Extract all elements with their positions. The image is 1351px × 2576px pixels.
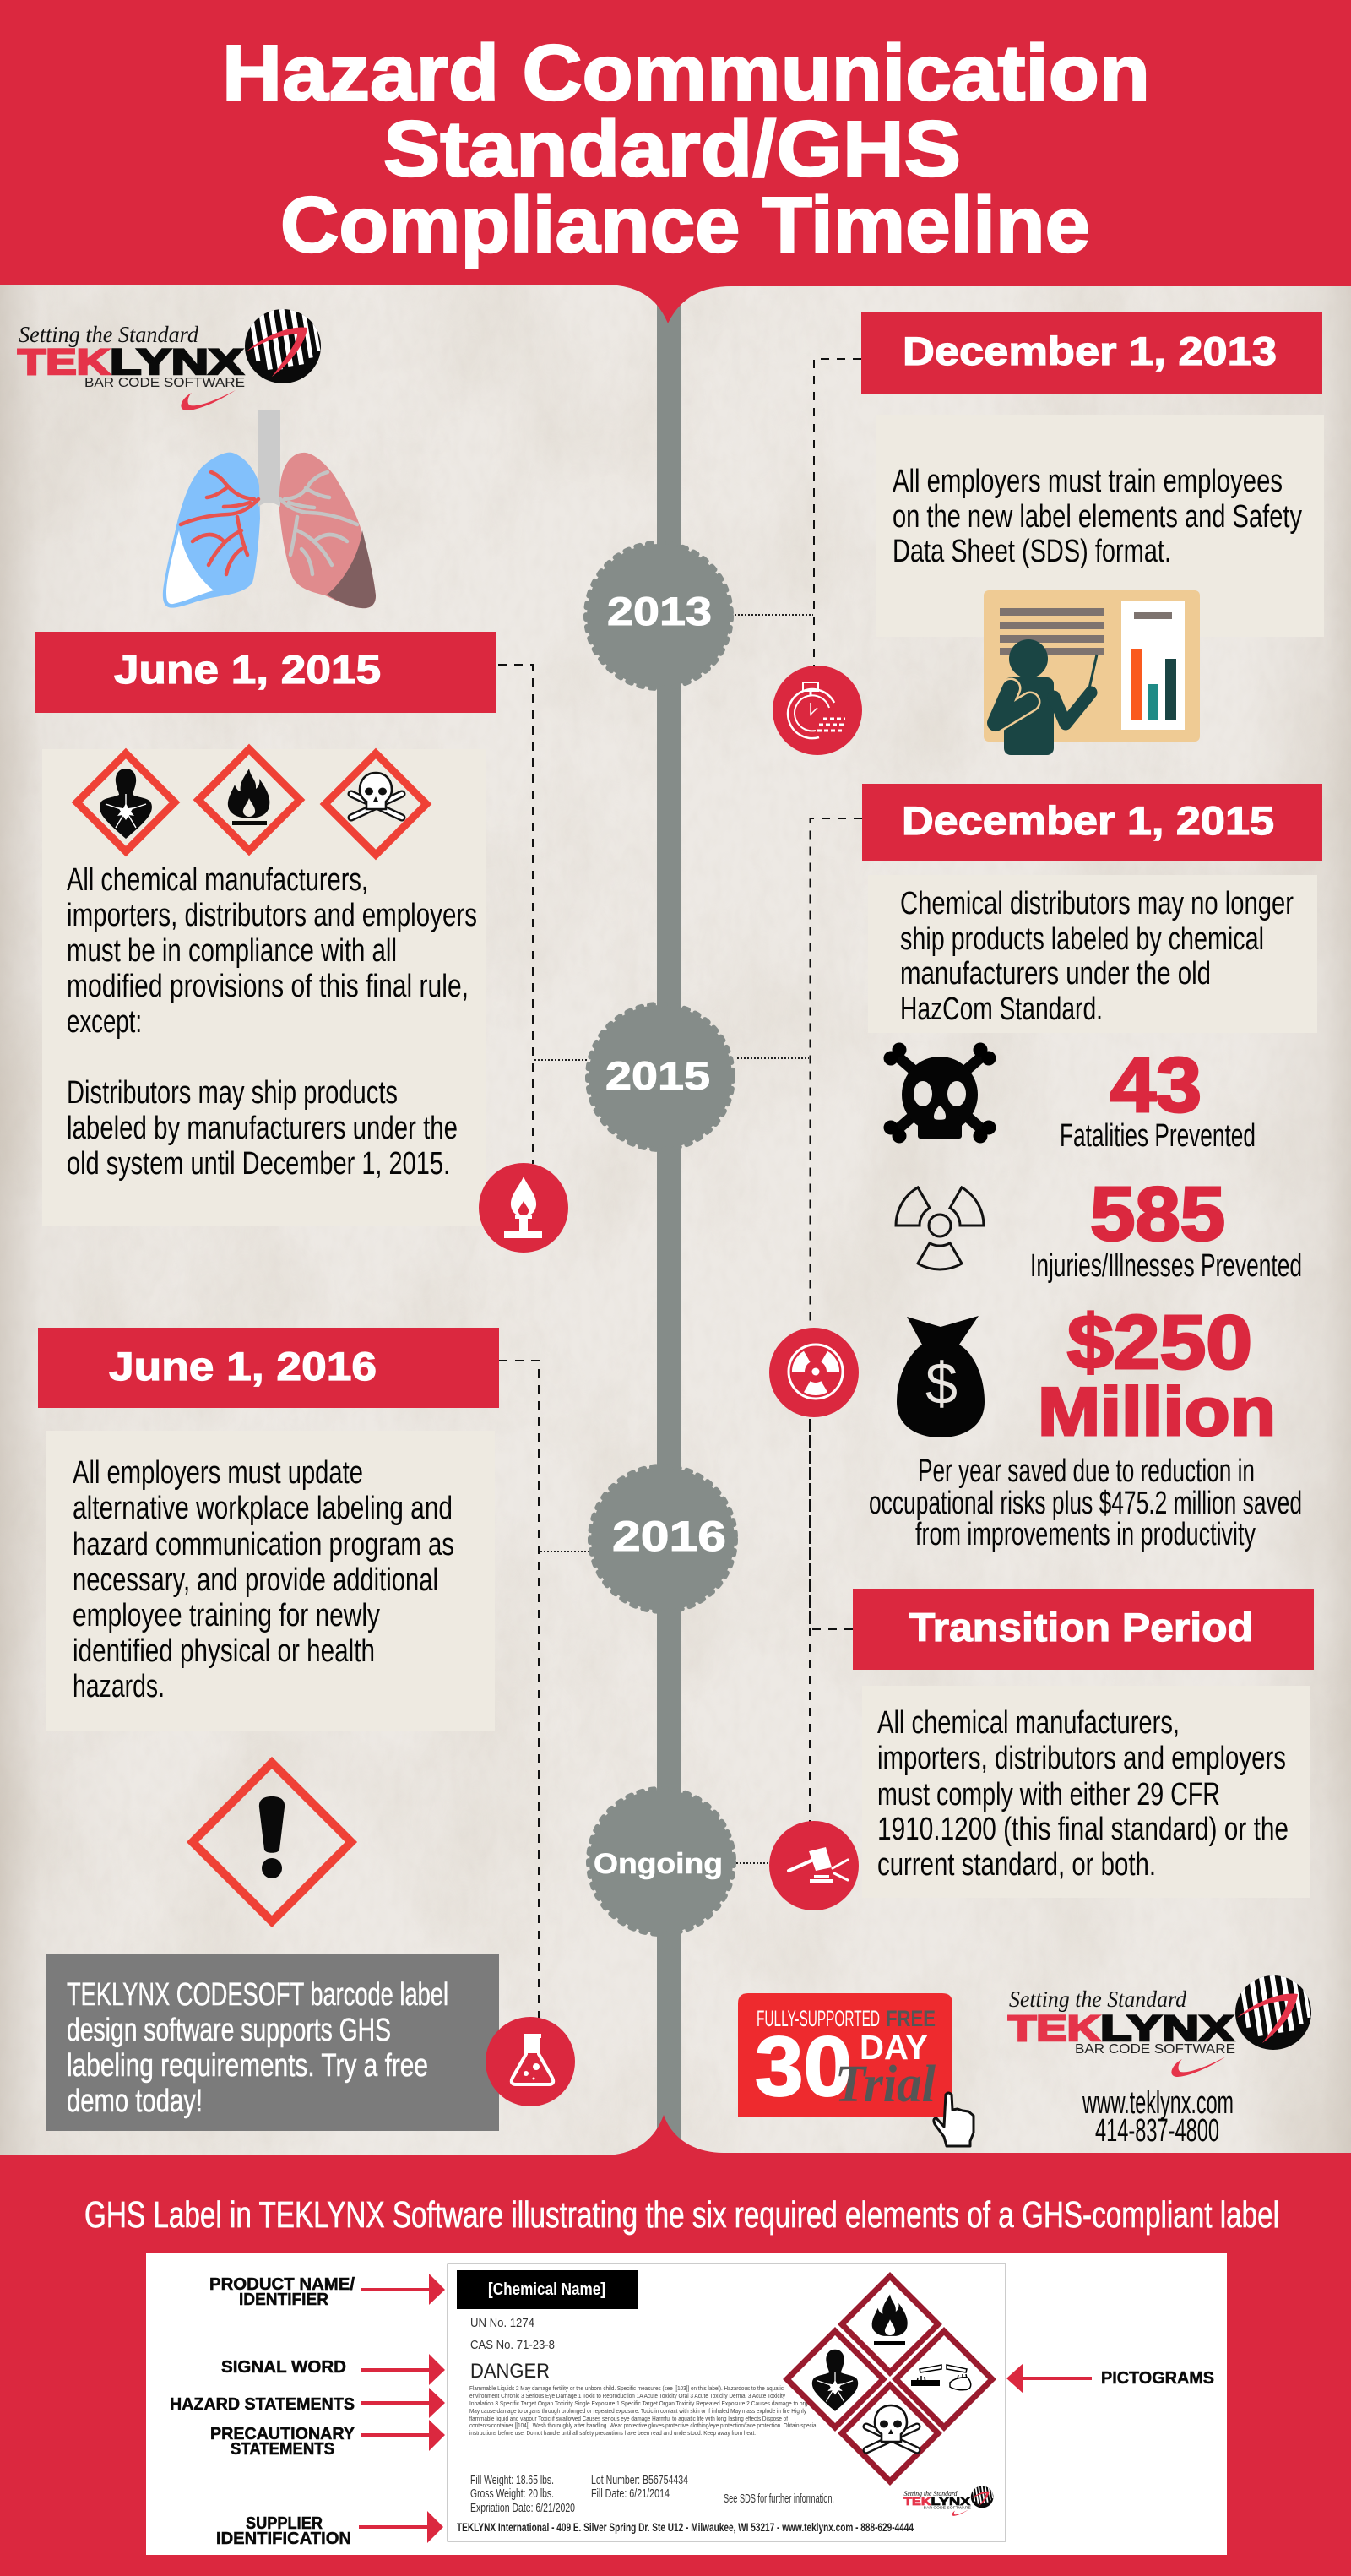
pictogram: health hazard (77, 753, 175, 851)
stat: 585 injuries: 585 (1090, 1172, 1225, 1257)
text: contact details: 414-837-4800 (1095, 2113, 1219, 2149)
icon: radiation (769, 1328, 859, 1417)
stat: $250 Million: Million (1038, 1374, 1276, 1450)
sample GHS label: DANGER (470, 2360, 550, 2383)
button: 30 day trial: DAY (860, 2028, 928, 2067)
callout: CODESOFT demo: labeling requirements. Try a free (67, 2048, 428, 2084)
footer band (0, 2115, 1351, 2576)
panel: June 1, 2016: All employers must update (73, 1455, 363, 1491)
panel: GHS label diagram (146, 2253, 1227, 2555)
date bar: Transition Period (853, 1589, 1314, 1670)
callout: signal word (221, 2354, 445, 2385)
body text: except: (67, 1004, 142, 1040)
panel: Transition Period: All chemical manufacturers, (877, 1705, 1180, 1741)
callout: product name: IDENTIFIER (239, 2291, 329, 2309)
panel: June 1, 2016: identified physical or health (73, 1633, 375, 1669)
date bar: December 1, 2013 (861, 312, 1322, 394)
panel: June 1, 2016: alternative workplace labeling and (73, 1491, 453, 1526)
logo: TEKLYNX footer: LYNX (1100, 2008, 1234, 2049)
date bar: December 1, 2013: December 1, 2013 (903, 329, 1277, 373)
sample GHS label: TEKLYNX International - 409 E. Silver Spring Dr. Ste U12 - Milwaukee, WI 53217 - www.teklynx.com - 888-629-4444 (457, 2520, 914, 2534)
icon: presenter with chart (984, 590, 1200, 755)
stat: $250 Million (1038, 1301, 1276, 1450)
date bar: December 1, 2015: December 1, 2015 (902, 798, 1274, 843)
callout: supplier identification: SUPPLIER (246, 2514, 323, 2533)
sample GHS label: Lot Number: B56754434 (591, 2473, 688, 2487)
connector: June 1, 2016 (499, 1361, 539, 2019)
logo: TEKLYNX footer: Setting the Standard (1009, 1986, 1186, 2012)
callout: product name (209, 2274, 445, 2309)
sample GHS label: Expriation Date: 6/21/2020 (470, 2501, 575, 2515)
stat: 43 fatalities: 43 (1110, 1042, 1202, 1128)
pictogram: flame (842, 2276, 938, 2372)
logo: TEKLYNX on label: TEK (903, 2495, 932, 2508)
body text: modified provisions of this final rule, (67, 969, 469, 1004)
hazard and precautionary statements: instructions before use. Do not handle until all safety precautions have been read and understood. Keep away from heat. (469, 2429, 756, 2437)
logo: TEKLYNX top left (18, 302, 321, 410)
sample GHS label: CAS No. 71-23-8 (470, 2338, 555, 2352)
panel: June 1, 2016: hazard communication program as (73, 1527, 454, 1562)
icon: hand cursor (934, 2093, 974, 2146)
callout: supplier identification: IDENTIFICATION (216, 2530, 351, 2548)
pictogram: exclamation (193, 1763, 351, 1921)
title: Hazard Communication (222, 29, 1150, 117)
panel: June 1, 2016 (46, 1431, 495, 1731)
callout: CODESOFT demo: design software supports GHS (67, 2013, 391, 2048)
callout: signal word: SIGNAL WORD (221, 2358, 346, 2377)
stat: 43 fatalities (1060, 1042, 1256, 1154)
panel: Transition Period: current standard, or both. (877, 1847, 1156, 1883)
pictogram: health hazard (787, 2331, 883, 2427)
body text: importers, distributors and employers (67, 898, 477, 933)
callout: pictograms (1006, 2363, 1214, 2394)
badge: 2013 (586, 543, 731, 688)
sample GHS label: See SDS for further information. (724, 2492, 834, 2506)
logo: TEKLYNX footer (1008, 1969, 1311, 2077)
connector: June 1, 2015 (498, 665, 533, 1164)
panel: Transition Period: must comply with either 29 CFR (877, 1777, 1220, 1812)
logo: TEKLYNX footer: BAR CODE SOFTWARE (1075, 2042, 1235, 2057)
button: 30 day trial (738, 1993, 952, 2117)
body text: Distributors may ship products (67, 1075, 398, 1111)
sample GHS label: Fill Date: 6/21/2014 (591, 2486, 670, 2501)
body text: labeled by manufacturers under the (67, 1111, 458, 1146)
badge: 2016 (590, 1466, 735, 1611)
logo: TEKLYNX top left: Setting the Standard (19, 322, 198, 347)
logo: TEKLYNX footer: TEK (1008, 2008, 1100, 2049)
timeline bar (657, 287, 681, 2145)
icon: money bag: $ (925, 1350, 958, 1416)
stat: 43 fatalities: Fatalities Prevented (1060, 1118, 1256, 1154)
body text: All chemical manufacturers, (67, 862, 368, 898)
date bar: June 1, 2016: June 1, 2016 (109, 1344, 377, 1389)
panel: June 1, 2016: employee training for newly (73, 1598, 380, 1633)
pictogram: flame (198, 749, 300, 851)
title (222, 29, 1150, 269)
icon: gavel (769, 1821, 859, 1910)
icon: flask (486, 2017, 575, 2106)
badge: 2016: 2016 (612, 1513, 726, 1560)
icon: lungs (163, 410, 376, 608)
callout: precautionary statements (210, 2420, 445, 2459)
logo: TEKLYNX top left: BAR CODE SOFTWARE (84, 376, 245, 390)
body text: old system until December 1, 2015. (67, 1146, 450, 1182)
hazard and precautionary statements: contents/container [[104]]. Wash thoroughly after handling. Wear protective gloves/protective clothing/eye protection/face protection. Obtain special (469, 2421, 817, 2429)
hazard and precautionary statements: Inhalation 3 Specific Target Organ Toxicity Single Exposure 1 Specific Target Organ Toxicity Repeated Exposure 2 Causes damage to organs (469, 2399, 817, 2407)
logo: TEKLYNX on label: BAR CODE SOFTWARE (924, 2506, 971, 2511)
pictogram: skull and crossbones (325, 753, 426, 855)
badge: 2013: 2013 (607, 589, 712, 633)
date bar: June 1, 2015 (35, 632, 496, 713)
button: 30 day trial: FREE (886, 2006, 936, 2031)
date bar: June 1, 2015: June 1, 2015 (114, 647, 381, 692)
callout: precautionary statements: PRECAUTIONARY (210, 2425, 355, 2443)
logo: TEKLYNX on label (903, 2484, 993, 2516)
button: 30 day trial: 30 (755, 2019, 852, 2114)
connector: December 1, 2015 (811, 818, 862, 1330)
logo: TEKLYNX top left: TEK (18, 342, 110, 383)
date bar: Transition Period: Transition Period (909, 1605, 1253, 1649)
date bar: June 1, 2016 (38, 1328, 499, 1408)
callout: product name: PRODUCT NAME/ (209, 2275, 355, 2294)
connector: transition period (810, 1419, 853, 1823)
callout: precautionary statements: STATEMENTS (231, 2440, 334, 2459)
panel: December 1, 2013 (876, 415, 1324, 637)
badge: 2015 (588, 1004, 733, 1149)
text: contact details (1082, 2085, 1234, 2149)
sample GHS label: Fill Weight: 18.65 lbs. (470, 2473, 554, 2487)
badge: Ongoing: Ongoing (594, 1848, 723, 1880)
callout: hazard statements (170, 2388, 445, 2418)
panel: December 1, 2015: HazCom Standard. (900, 992, 1103, 1027)
chemical name bar: [Chemical Name] (488, 2280, 605, 2299)
panel: December 1, 2013: Data Sheet (SDS) format. (893, 534, 1171, 569)
stat: 585 injuries (1030, 1172, 1302, 1284)
panel: Transition Period (862, 1686, 1310, 1898)
hazard and precautionary statements: May cause damage to organs through prolonged or repeated exposure. Toxic in contact with skin or if inhaled May mass explode in fire Highly (469, 2407, 806, 2415)
dotted connector: 2015 left (534, 1059, 588, 1061)
title: Standard/GHS (383, 105, 961, 193)
date bar: December 1, 2015 (862, 784, 1322, 861)
icon: burner flame (479, 1163, 568, 1253)
callout: CODESOFT demo: demo today! (67, 2084, 203, 2119)
logo: TEKLYNX on label: Setting the Standard (904, 2490, 958, 2497)
badge: Ongoing (589, 1789, 734, 1934)
chemical name bar (457, 2270, 638, 2309)
logo: TEKLYNX on label: LYNX (931, 2495, 971, 2508)
icon: stopwatch (773, 666, 862, 755)
hazard and precautionary statements: Flammable Liquids 2 May damage fertility or the unborn child. Specific measures (see [[103]] on this label). Hazardous to the aquatic (469, 2384, 784, 2392)
callout: supplier identification (216, 2511, 443, 2548)
panel: June 1, 2016: hazards. (73, 1669, 165, 1704)
button: 30 day trial: FULLY-SUPPORTED (757, 2006, 880, 2031)
pictogram: corrosion (896, 2331, 992, 2427)
dotted connector: 2013 (735, 614, 813, 616)
dotted connector: ongoing (733, 1862, 769, 1864)
panel: June 1, 2015 (42, 749, 486, 1226)
title: Compliance Timeline (280, 181, 1090, 269)
icon: money bag (897, 1316, 985, 1437)
callout: CODESOFT demo: TEKLYNX CODESOFT barcode label (67, 1977, 448, 2013)
callout: CODESOFT demo (46, 1954, 499, 2131)
callout: hazard statements: HAZARD STATEMENTS (170, 2395, 355, 2414)
body text: must be in compliance with all (67, 933, 397, 969)
body text (67, 862, 477, 1182)
panel: December 1, 2015 (868, 875, 1317, 1033)
badge: 2015: 2015 (605, 1053, 710, 1098)
button: 30 day trial: Trial (835, 2056, 936, 2113)
sample GHS label: UN No. 1274 (470, 2316, 534, 2330)
sample GHS label (448, 2264, 1006, 2541)
hazard and precautionary statements: environment Chronic 3 Serious Eye Damage 1 Toxic to Reproduction 1A Acute Toxicity Oral 3 Acute Toxicity Dermal 3 Acute Toxicity (469, 2392, 785, 2399)
sample GHS label: Gross Weight: 20 lbs. (470, 2486, 554, 2501)
logo: TEKLYNX top left: LYNX (110, 342, 243, 383)
hazard and precautionary statements: flammable liquid and vapour Toxic if swallowed Causes serious eye damage Harmful to aquatic life with long lasting effects Dispose of (469, 2415, 788, 2422)
icon: black skull (883, 1042, 996, 1144)
connector: December 1, 2013 (814, 359, 861, 667)
dotted connector: 2015 right (737, 1057, 809, 1059)
text: savings note (869, 1454, 1302, 1552)
panel: December 1, 2015: manufacturers under the old (900, 956, 1211, 992)
hazard and precautionary statements (469, 2384, 817, 2437)
header band (0, 0, 1351, 323)
pictogram: skull and crossbones (842, 2385, 938, 2481)
panel: June 1, 2016: necessary, and provide additional (73, 1562, 438, 1598)
callout: pictograms: PICTOGRAMS (1101, 2369, 1214, 2388)
icon: radiation outline (891, 1184, 989, 1269)
text: contact details: www.teklynx.com (1082, 2085, 1234, 2121)
stat: $250 Million: $250 (1067, 1301, 1252, 1385)
dotted connector: 2016 (540, 1551, 593, 1552)
